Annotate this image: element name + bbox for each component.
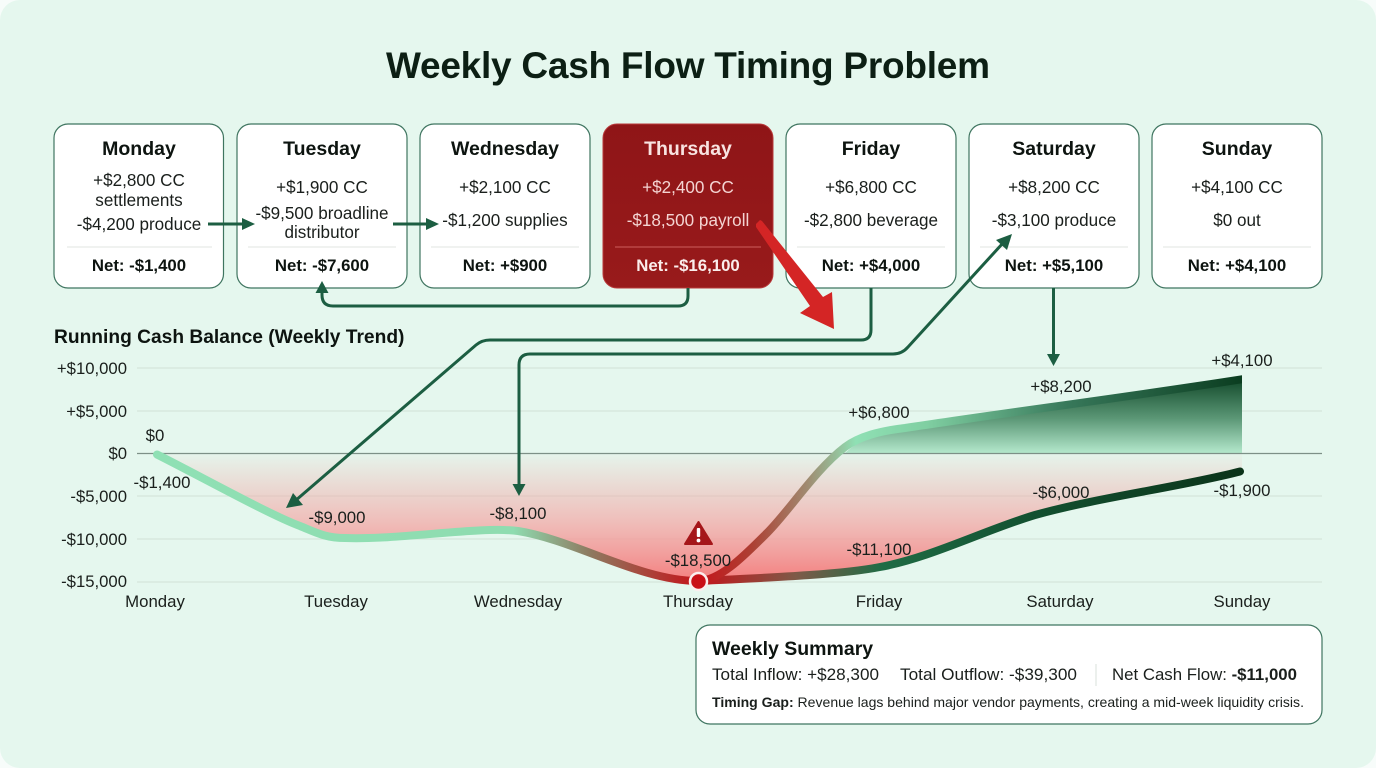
panel: weekly summary: Weekly Summary: [712, 638, 873, 660]
data labels: -$18,500: [665, 551, 731, 570]
icon: warning triangle: [685, 522, 712, 544]
zero line: [137, 452, 1322, 454]
x axis labels: Monday: [125, 592, 185, 611]
chart heading: Running Cash Balance (Weekly Trend): [54, 327, 404, 348]
panel: Sunday: Net: +$4,100: [1188, 256, 1286, 275]
data labels: +$8,200: [1030, 377, 1092, 396]
panel: Monday: settlements: [95, 191, 183, 210]
panel: Tuesday: Net: -$7,600: [275, 256, 369, 275]
low point marker: [690, 573, 707, 590]
upper balance line, Monday to Thursday: [157, 454, 698, 581]
data labels: -$6,000: [1033, 483, 1089, 502]
panel: Tuesday: distributor: [284, 223, 360, 242]
panel: Friday: -$2,800 beverage: [804, 211, 938, 230]
panel: Friday: Friday: [842, 138, 900, 160]
data labels: [134, 351, 1273, 570]
panel: Tuesday: -$9,500 broadline: [255, 204, 389, 223]
y axis labels: -$5,000: [70, 487, 127, 506]
panel: Sunday: Sunday: [1202, 138, 1272, 160]
panel: weekly summary: [696, 625, 1322, 724]
line chart: running cash balance: [57, 351, 1322, 611]
panel: Monday: [54, 124, 224, 288]
panel: Monday: Monday: [102, 138, 176, 160]
data labels: +$6,800: [848, 403, 910, 422]
data labels: -$1,900: [1214, 481, 1270, 500]
panel: Sunday: [1152, 124, 1322, 288]
panel: Tuesday: Tuesday: [283, 138, 361, 160]
panel: Thursday (highlighted): Thursday: [644, 138, 732, 160]
x axis labels: [125, 592, 1271, 611]
panel: Sunday: +$4,100 CC: [1191, 178, 1283, 197]
arrow: Saturday card to Wednesday chart point: [512, 234, 1012, 496]
data labels: -$1,400: [134, 473, 190, 492]
panel: Saturday: -$3,100 produce: [992, 211, 1116, 230]
panel: weekly summary: Net Cash Flow: -$11,000: [1112, 665, 1297, 684]
arrow: Thursday back to Tuesday: [316, 281, 688, 306]
panel: Wednesday: Net: +$900: [463, 256, 547, 275]
panel: Thursday (highlighted): Net: -$16,100: [636, 256, 740, 275]
panel: weekly summary: Timing Gap: Revenue lags behind major vendor payments, creating a mid-week liquidity crisis.: [712, 694, 1304, 710]
upper balance line, Thursday to Sunday: [698, 378, 1250, 581]
panel: Friday: +$6,800 CC: [825, 178, 917, 197]
panel: weekly summary: Total Outflow: -$39,300: [900, 665, 1077, 684]
panel: Wednesday: Wednesday: [451, 138, 559, 160]
panel: Wednesday: -$1,200 supplies: [442, 211, 568, 230]
data labels: -$8,100: [490, 504, 546, 523]
lower balance line: [698, 472, 1240, 581]
x axis labels: Thursday: [663, 592, 734, 611]
deficit red area: [155, 453, 1242, 581]
x axis labels: Sunday: [1214, 592, 1271, 611]
panel: Friday: [786, 124, 956, 288]
surplus green area: [845, 376, 1242, 453]
panel: Sunday: $0 out: [1213, 211, 1261, 230]
arrow: payroll hit (red): [756, 220, 834, 329]
arrow: Tuesday to Wednesday: [393, 218, 439, 230]
y axis labels: [57, 359, 127, 591]
panel: Thursday (highlighted): +$2,400 CC: [642, 178, 734, 197]
data labels: -$9,000: [309, 508, 365, 527]
panel: Wednesday: [420, 124, 590, 288]
y axis labels: -$15,000: [61, 572, 127, 591]
panel: Tuesday: +$1,900 CC: [276, 178, 368, 197]
x axis labels: Friday: [856, 592, 903, 611]
panel: Friday: Net: +$4,000: [822, 256, 920, 275]
arrow: Monday to Tuesday: [208, 218, 255, 230]
panel: Monday: +$2,800 CC: [93, 171, 185, 190]
x axis labels: Tuesday: [304, 592, 368, 611]
panel: Saturday: [969, 124, 1139, 288]
data labels: -$11,100: [846, 540, 912, 559]
panel: Tuesday: [237, 124, 407, 288]
panel: Saturday: +$8,200 CC: [1008, 178, 1100, 197]
y axis labels: +$10,000: [57, 359, 127, 378]
panel: Thursday (highlighted): -$18,500 payroll: [627, 211, 749, 230]
panel: Monday: Net: -$1,400: [92, 256, 186, 275]
panel: Saturday: Net: +$5,100: [1005, 256, 1103, 275]
x axis labels: Wednesday: [474, 592, 563, 611]
x axis labels: Saturday: [1026, 592, 1094, 611]
panel: weekly summary: Total Inflow: +$28,300: [712, 665, 879, 684]
data labels: +$4,100: [1211, 351, 1273, 370]
panel: Saturday: Saturday: [1012, 138, 1096, 160]
panel: Thursday (highlighted): [603, 124, 773, 288]
y axis labels: -$10,000: [61, 530, 127, 549]
arrow: Saturday to chart: [1047, 288, 1060, 366]
data labels: $0: [146, 426, 164, 445]
y axis labels: +$5,000: [66, 402, 127, 421]
panel: Wednesday: +$2,100 CC: [459, 178, 551, 197]
title: Weekly Cash Flow Timing Problem: [386, 45, 990, 86]
arrow: Friday to Tuesday chart point: [286, 288, 871, 508]
y axis labels: $0: [108, 444, 127, 463]
chart gridlines: [137, 368, 1322, 582]
panel: Monday: -$4,200 produce: [77, 215, 201, 234]
